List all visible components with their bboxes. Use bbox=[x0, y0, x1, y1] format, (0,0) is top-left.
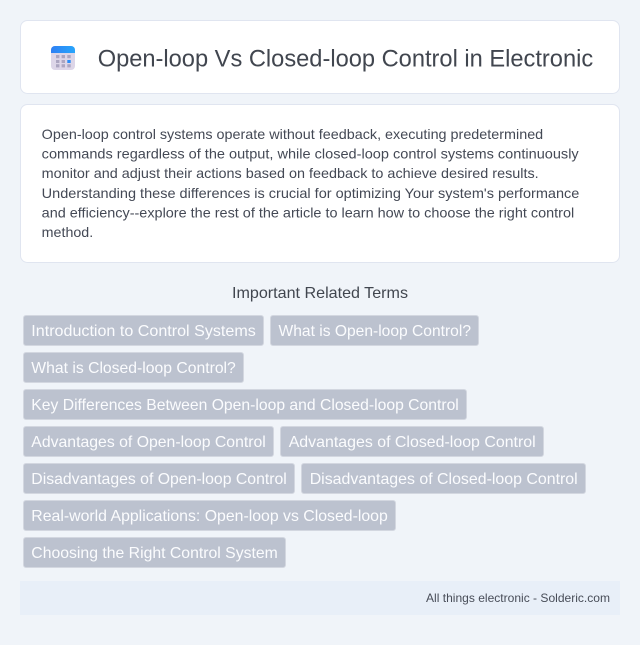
panel: summary card bbox=[20, 104, 620, 262]
tag: choosing bbox=[24, 538, 286, 568]
tag: applications: Real-world Applications: Open-loop vs Closed-loop bbox=[31, 508, 388, 525]
text block: summary: Open-loop control systems operate without feedback, executing predetermined bbox=[42, 126, 543, 142]
panel: header card bbox=[20, 20, 620, 94]
footer: All things electronic - Solderic.com bbox=[426, 591, 610, 605]
text block: summary: and efficiency--explore the rest of the article to learn how to choose the right control bbox=[42, 204, 574, 220]
tag: key differences: Key Differences Between Open-loop and Closed-loop Control bbox=[31, 397, 459, 414]
tag: closed-loop: What is Closed-loop Control? bbox=[31, 360, 236, 377]
tag: disadvantages open bbox=[24, 464, 294, 494]
tag: choosing: Choosing the Right Control System bbox=[31, 545, 278, 562]
text block: summary bbox=[42, 126, 580, 240]
tag: open-loop bbox=[270, 316, 478, 346]
tag: closed-loop bbox=[24, 352, 244, 382]
text block: summary: monitor and adjust their actions based on feedback to achieve desired results. bbox=[42, 165, 539, 181]
tag: disadvantages open: Disadvantages of Open-loop Control bbox=[31, 471, 287, 488]
tag: key differences bbox=[24, 390, 466, 420]
tag: advantages open: Advantages of Open-loop Control bbox=[31, 434, 266, 451]
tag: advantages closed bbox=[280, 426, 544, 456]
title: Open-loop Vs Closed-loop Control in Electronic bbox=[98, 46, 593, 72]
text block: summary: Understanding these differences is crucial for optimizing Your system's performance bbox=[42, 185, 580, 201]
tag: disadvantages closed bbox=[302, 464, 586, 494]
tag: advantages closed: Advantages of Closed-loop Control bbox=[289, 434, 536, 451]
tag: open-loop: What is Open-loop Control? bbox=[278, 323, 471, 340]
text block: summary: method. bbox=[42, 224, 93, 240]
tag: disadvantages closed: Disadvantages of Closed-loop Control bbox=[310, 471, 578, 488]
tag: advantages open bbox=[24, 426, 274, 456]
tag: introduction bbox=[24, 316, 264, 346]
text block: summary: commands regardless of the output, while closed-loop control systems continuously bbox=[42, 146, 579, 162]
tag: applications bbox=[24, 500, 396, 530]
tag: introduction: Introduction to Control Systems bbox=[31, 323, 256, 340]
footer bbox=[20, 581, 620, 615]
heading: related terms: Important Related Terms bbox=[232, 285, 408, 302]
icon: calendar bbox=[51, 46, 75, 70]
tag list: related terms bbox=[24, 316, 586, 568]
